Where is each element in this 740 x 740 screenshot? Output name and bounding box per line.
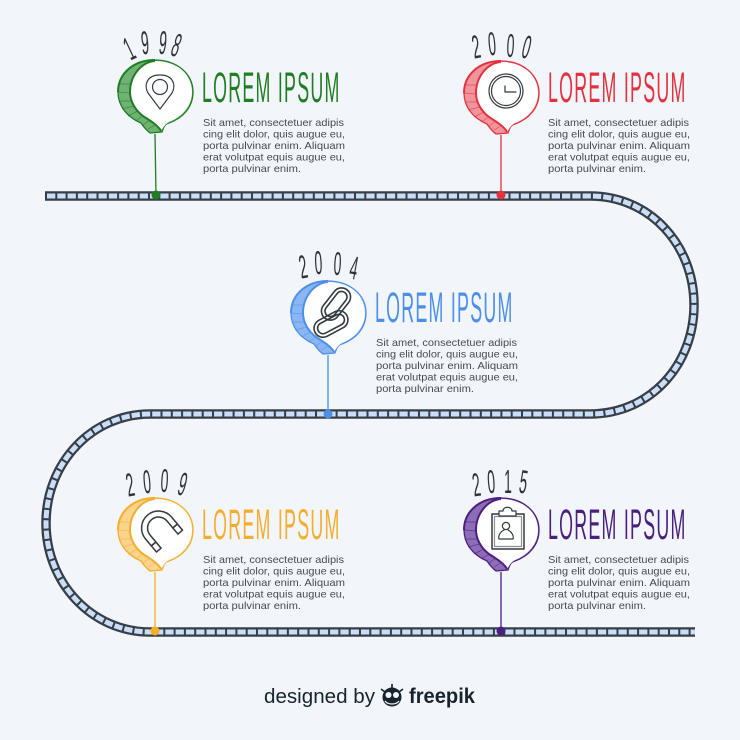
- body text: porta pulvinar enim. Aliquam: [548, 141, 690, 152]
- year 2004: 4: [347, 250, 361, 287]
- year 2004: [296, 245, 361, 287]
- body text: cing elit dolor, quis augue eu,: [548, 130, 690, 140]
- connector stem: [154, 572, 156, 631]
- heading: LOREM IPSUM: [202, 63, 341, 111]
- freepik wordmark: freepik: [409, 685, 475, 708]
- body text: [203, 555, 345, 612]
- body text: porta pulvinar enim.: [203, 601, 301, 612]
- year 2000: 0: [518, 29, 535, 67]
- connector stem: [500, 135, 502, 195]
- icon: clipboard with person: [492, 507, 524, 549]
- year 2000: [469, 26, 535, 67]
- year 2015: 0: [486, 464, 496, 501]
- body text: porta pulvinar enim. Aliquam: [203, 141, 345, 152]
- body text: [548, 118, 690, 175]
- speech bubble: [464, 498, 539, 571]
- speech bubble: [291, 281, 366, 354]
- body text: [376, 338, 518, 395]
- year 2000: 2: [469, 29, 483, 66]
- year 2015: 5: [517, 464, 530, 501]
- winding timeline track: [45, 196, 695, 632]
- year 1998: [118, 25, 186, 68]
- body text: porta pulvinar enim.: [548, 601, 646, 612]
- timeline dot: [496, 626, 506, 636]
- icon: clock: [489, 74, 523, 108]
- body text: porta pulvinar enim. Aliquam: [548, 578, 690, 589]
- body text: porta pulvinar enim.: [203, 164, 301, 175]
- timeline dot: [150, 626, 160, 636]
- milestone 2009: [118, 463, 345, 636]
- body text: cing elit dolor, quis augue eu,: [203, 566, 345, 578]
- heading: LOREM IPSUM: [202, 500, 341, 548]
- year 2000: 0: [506, 28, 515, 65]
- year 2015: 2: [470, 467, 483, 504]
- body text: Sit amet, consectetuer adipis: [548, 555, 689, 566]
- body text: [548, 555, 690, 612]
- body text: Sit amet, consectetuer adipis: [376, 338, 517, 349]
- year 2009: 0: [160, 463, 169, 500]
- year 2000: 0: [487, 26, 498, 63]
- year 2015: 1: [504, 464, 512, 501]
- body text: Sit amet, consectetuer adipis: [203, 118, 344, 129]
- body text: cing elit dolor, quis augue eu,: [203, 130, 345, 140]
- year 2009: 9: [174, 466, 191, 504]
- connector stem: [155, 134, 156, 195]
- milestone 2004: [291, 245, 518, 418]
- body text: erat volutpat equis augue eu,: [548, 152, 690, 164]
- heading: LOREM IPSUM: [548, 63, 687, 111]
- speech bubble: [118, 60, 193, 133]
- year 2009: [123, 463, 191, 504]
- connector stem: [327, 355, 329, 414]
- icon: chain links: [311, 284, 354, 340]
- milestone 2000: [464, 26, 690, 200]
- timeline dot: [324, 410, 332, 418]
- speech bubble: [464, 61, 539, 134]
- year 1998: 9: [157, 25, 168, 62]
- footer credit: [264, 684, 475, 708]
- timeline dot: [152, 190, 160, 200]
- body text: cing elit dolor, quis augue eu,: [376, 350, 518, 360]
- year 1998: 1: [118, 31, 141, 68]
- milestone 2015: [464, 464, 690, 636]
- year 1998: 8: [167, 28, 186, 65]
- body text: porta pulvinar enim.: [548, 164, 646, 175]
- body text: erat volutpat equis augue eu,: [548, 590, 690, 600]
- timeline dot: [496, 190, 506, 200]
- icon: horseshoe magnet: [135, 504, 183, 552]
- body text: porta pulvinar enim. Aliquam: [376, 361, 518, 372]
- body text: porta pulvinar enim.: [376, 384, 474, 395]
- connector stem: [500, 572, 502, 631]
- body text: erat volutpat equis augue eu,: [203, 152, 345, 164]
- body text: Sit amet, consectetuer adipis: [548, 118, 689, 129]
- icon: map pin: [146, 75, 174, 109]
- heading: LOREM IPSUM: [548, 500, 687, 548]
- body text: cing elit dolor, quis augue eu,: [548, 566, 690, 578]
- year 2009: 0: [142, 464, 153, 501]
- year 2009: 2: [123, 467, 137, 504]
- year 2004: 0: [333, 246, 342, 283]
- body text: Sit amet, consectetuer adipis: [203, 555, 344, 566]
- designed by label: designed by: [264, 686, 375, 708]
- body text: [203, 118, 345, 175]
- year 2015: [470, 464, 530, 504]
- year 2004: 2: [296, 249, 310, 286]
- body text: porta pulvinar enim. Aliquam: [203, 578, 345, 589]
- body text: erat volutpat equis augue eu,: [376, 372, 518, 384]
- icon: freepik logo: [381, 684, 403, 706]
- heading: LOREM IPSUM: [375, 283, 514, 331]
- body text: erat volutpat equis augue eu,: [203, 590, 345, 600]
- year 2004: 0: [314, 245, 323, 282]
- speech bubble: [118, 498, 193, 571]
- year 1998: 9: [140, 25, 151, 62]
- milestone 1998: [118, 25, 345, 200]
